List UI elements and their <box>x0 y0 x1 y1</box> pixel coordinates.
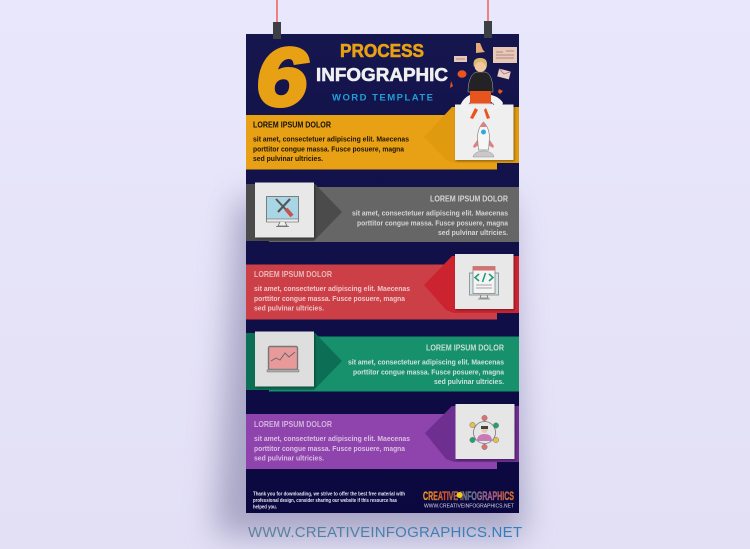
text block: sed pulvinar ultricies. <box>434 377 504 386</box>
footer note: helped you. <box>253 504 278 510</box>
text block: sed pulvinar ultricies. <box>253 154 323 163</box>
text block: porttitor congue massa. Fusce posuere, magna <box>254 294 406 303</box>
card <box>455 254 514 309</box>
icon: speech bubble <box>458 70 466 78</box>
panel: step 3 <box>246 254 519 320</box>
text block: porttitor congue massa. Fusce posuere, magna <box>357 218 509 227</box>
poster <box>246 34 519 513</box>
text block <box>352 208 509 237</box>
text block: sit amet, consectetuer adipiscing elit. Maecenas <box>352 208 508 218</box>
big number 6: 6 <box>256 32 309 123</box>
logo: WWW.CREATIVEINFOGRAPHICS.NET <box>424 504 514 510</box>
title <box>316 41 448 104</box>
text block: sit amet, consectetuer adipiscing elit. Maecenas <box>254 284 410 293</box>
panel: step 2 <box>246 182 519 242</box>
icon: small accents <box>450 81 503 94</box>
icon: document <box>493 47 517 63</box>
icon: monitor with tools <box>266 196 298 226</box>
text block: porttitor congue massa. Fusce posuere, magna <box>254 444 406 453</box>
text block: sit amet, consectetuer adipiscing elit. Maecenas <box>253 134 409 144</box>
title: INFOGRAPHIC <box>316 64 448 85</box>
text block: porttitor congue massa. Fusce posuere, magna <box>253 144 405 153</box>
illustration: person at laptop <box>450 43 517 119</box>
card <box>456 404 514 459</box>
panel: step 1 <box>246 104 519 170</box>
card <box>255 332 314 386</box>
panel: step 4 <box>246 332 519 392</box>
icon: bell <box>476 43 485 53</box>
text block <box>254 284 410 312</box>
text block <box>348 358 505 386</box>
website url: WWW.CREATIVEINFOGRAPHICS.NET <box>248 524 522 541</box>
heading: LOREM IPSUM DOLOR <box>254 269 332 279</box>
clips <box>273 21 492 39</box>
icon: rocket <box>473 122 494 157</box>
card <box>255 182 314 238</box>
footer note: professional design, consider sharing our website if this resource has <box>253 498 397 504</box>
icon: note <box>454 56 467 62</box>
logo <box>423 489 514 510</box>
card <box>455 104 514 160</box>
text block: sed pulvinar ultricies. <box>438 228 508 237</box>
heading: LOREM IPSUM DOLOR <box>254 419 332 429</box>
title: WORD TEMPLATE <box>332 92 433 104</box>
panel: step 5 <box>246 404 519 469</box>
icon: code window <box>470 266 498 299</box>
text block: porttitor congue massa. Fusce posuere, magna <box>353 367 505 376</box>
text block: sed pulvinar ultricies. <box>254 454 324 462</box>
footer note: Thank you for downloading, we strive to offer the best free material with <box>253 492 405 498</box>
person <box>460 58 503 119</box>
heading: LOREM IPSUM DOLOR <box>253 120 331 130</box>
title: PROCESS <box>340 41 424 61</box>
footer note <box>253 492 405 510</box>
text block <box>253 134 409 163</box>
icon: network person <box>470 415 499 450</box>
heading: LOREM IPSUM DOLOR <box>426 342 504 352</box>
poster shadow <box>215 200 525 536</box>
text block: sit amet, consectetuer adipiscing elit. Maecenas <box>254 434 410 443</box>
hanging clips <box>276 0 489 24</box>
text block <box>254 434 410 462</box>
heading: LOREM IPSUM DOLOR <box>430 194 508 204</box>
text block: sed pulvinar ultricies. <box>254 304 324 312</box>
text block: sit amet, consectetuer adipiscing elit. Maecenas <box>348 358 504 366</box>
logo: CREATIVE INFOGRAPHICS <box>423 489 514 503</box>
icon: envelope <box>497 69 511 79</box>
icon: laptop chart <box>267 346 299 372</box>
